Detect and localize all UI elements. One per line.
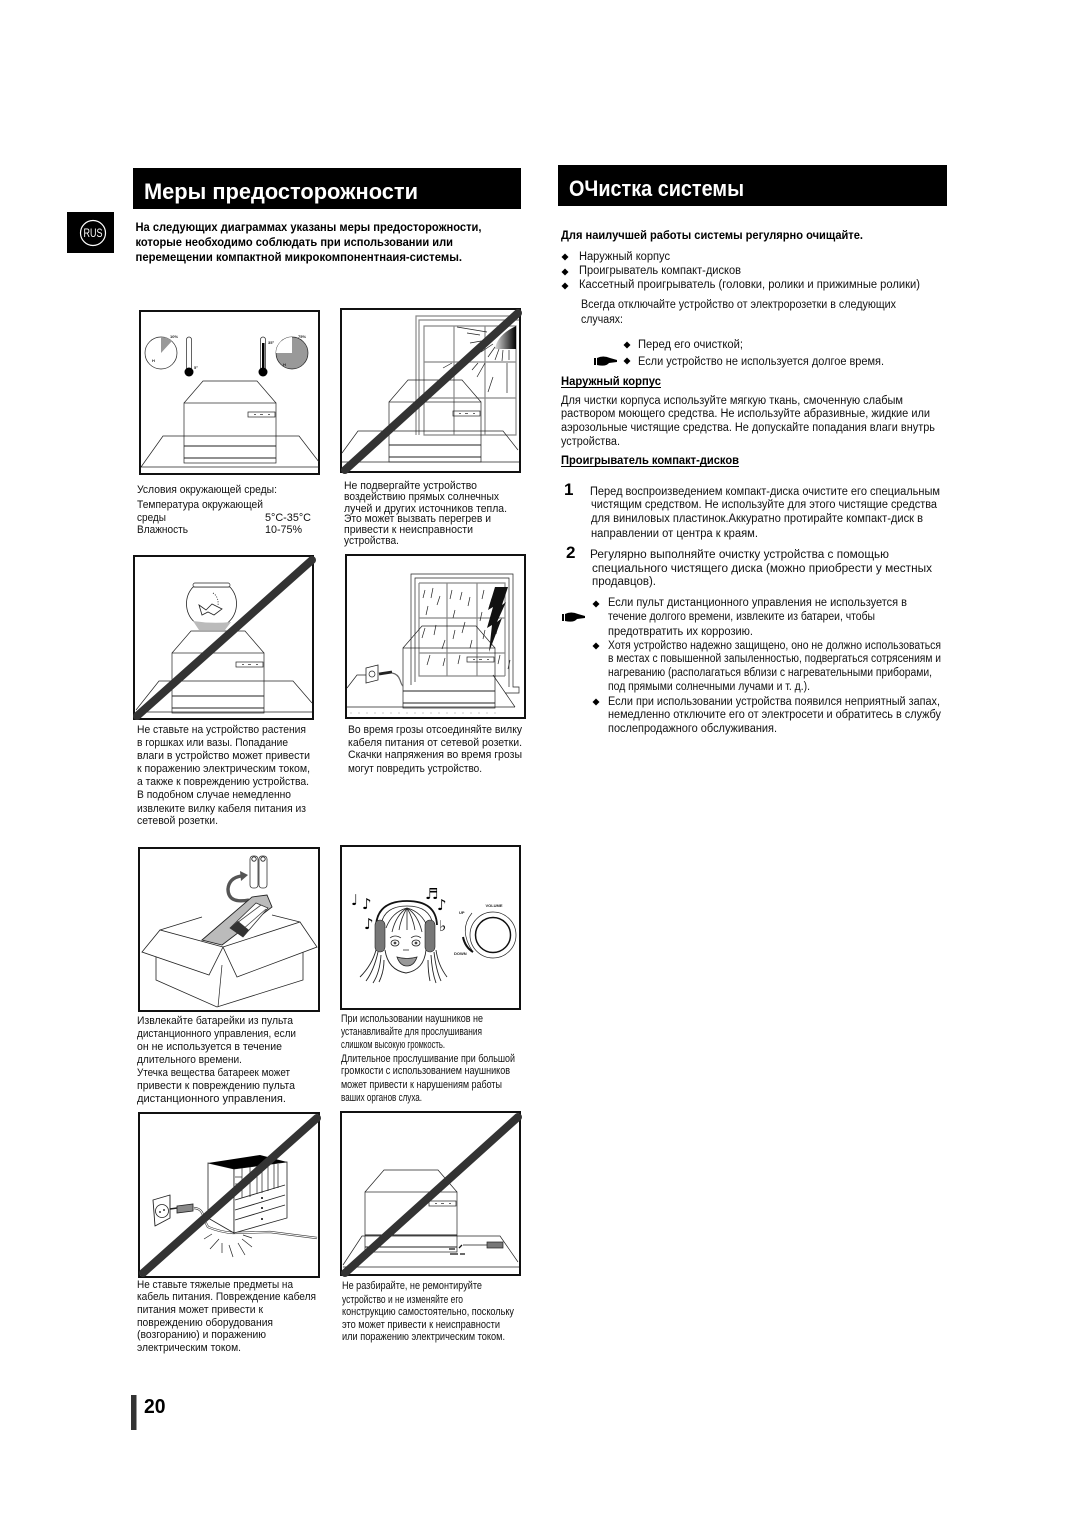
caption: operating environment: среды bbox=[137, 512, 166, 524]
bangs bbox=[386, 908, 428, 932]
hair bbox=[360, 950, 447, 983]
section: outer casing: раствором моющего средства. Не используйте абразивные, жидкие или bbox=[561, 408, 930, 420]
caption: no heavy objects on cable: электрическим током. bbox=[137, 1342, 241, 1354]
panel: operating environment bbox=[140, 311, 319, 474]
music notes: ♬ bbox=[425, 885, 438, 903]
receiver bbox=[403, 626, 495, 708]
music notes: ♭ bbox=[439, 917, 446, 935]
cabinet with books bbox=[208, 1155, 287, 1233]
notes: maintenance: Если при использовании устройства появился неприятный запах, bbox=[608, 696, 940, 708]
notes: maintenance: послепродажного обслуживания. bbox=[608, 723, 777, 735]
notes: maintenance: предотвратить их коррозию. bbox=[608, 626, 753, 638]
caption: do not disassemble bbox=[342, 1280, 514, 1343]
icon: thermometer 5 degrees: 5° bbox=[194, 365, 198, 370]
lightning bolt bbox=[487, 587, 508, 652]
notes: maintenance: Если пульт дистанционного управления не используется в bbox=[608, 597, 907, 609]
caption: remove batteries: Утечка вещества батареек может bbox=[137, 1067, 290, 1079]
icon: pointing hand bbox=[594, 356, 617, 366]
caption: unplug during thunderstorm bbox=[348, 724, 522, 775]
caption: no vases on device: Не ставьте на устройство растения bbox=[137, 724, 306, 736]
caption: operating environment: 10-75% bbox=[265, 524, 302, 536]
caption: operating environment: Условия окружающей среды: bbox=[137, 484, 277, 496]
window with sun bbox=[416, 316, 519, 435]
receiver bbox=[184, 381, 276, 463]
icon: thermometer 35 degrees bbox=[258, 337, 274, 376]
panel: no vases on device bbox=[134, 556, 313, 719]
music notes: ♩ bbox=[351, 891, 358, 909]
step 2: Регулярно выполняйте очистку устройства с помощью bbox=[590, 549, 889, 561]
caption: unplug during thunderstorm: Во время грозы отсоединяйте вилку bbox=[348, 724, 522, 736]
caption: remove batteries: длительного времени. bbox=[137, 1054, 242, 1066]
caption: remove batteries: Извлекайте батарейки из пульта bbox=[137, 1015, 294, 1027]
caption: no direct sunlight: устройства. bbox=[344, 535, 399, 547]
step 1: для виниловых пластинок.Аккуратно протирайте компакт-диск в bbox=[591, 513, 923, 525]
note: when to unplug: Перед его очисткой; bbox=[638, 339, 743, 351]
receiver bbox=[389, 380, 481, 462]
section: outer casing: Для чистки корпуса используйте мягкую ткань, смоченную слабым bbox=[561, 395, 903, 407]
face bbox=[385, 950, 426, 973]
intro text: cleaning: Для наилучшей работы системы регулярно очищайте. bbox=[561, 230, 863, 242]
caption: unplug during thunderstorm: кабеля питания от сетевой розетки. bbox=[348, 737, 522, 749]
caption: no direct sunlight: привести к неисправности bbox=[344, 524, 473, 536]
caption: operating environment bbox=[137, 484, 311, 536]
icon: humidity pie 10% bbox=[145, 334, 178, 369]
wall socket and plug bbox=[153, 1195, 193, 1226]
notes: maintenance: нагреванию (располагаться вблизи с нагревательными приборами, bbox=[608, 667, 932, 679]
heading bar: precautions bbox=[133, 168, 521, 209]
section: outer casing: Наружный корпус bbox=[561, 376, 662, 388]
eyes bbox=[391, 940, 399, 946]
caption: headphone volume: громкости с использованием наушников bbox=[341, 1065, 510, 1077]
text: unplug notice bbox=[581, 299, 896, 326]
intro text: precautions: На следующих диаграммах указаны меры предосторожности, bbox=[136, 222, 482, 234]
curved arrow bbox=[228, 871, 249, 901]
caption: no heavy objects on cable: (возгоранию) и поражению bbox=[137, 1329, 266, 1341]
receiver bbox=[365, 1170, 457, 1252]
volume knob: UP bbox=[459, 910, 465, 915]
step 1: направлении от центра к краям. bbox=[591, 528, 758, 540]
caption: headphone volume: слишком высокую громкость. bbox=[341, 1039, 445, 1051]
step 1: Перед воспроизведением компакт-диска очистите его специальным bbox=[590, 486, 940, 498]
caption: headphone volume bbox=[341, 1013, 515, 1104]
music notes bbox=[351, 885, 447, 935]
caption: headphone volume: может привести к нарушениям работы bbox=[341, 1079, 502, 1091]
step 2: 2 bbox=[566, 543, 575, 562]
music notes: ♪ bbox=[364, 915, 374, 933]
caption: headphone volume: устанавливайте для прослушивания bbox=[341, 1026, 482, 1038]
caption: do not disassemble: Не разбирайте, не ремонтируйте bbox=[342, 1280, 482, 1292]
bulleted list: parts to clean: Проигрыватель компакт-дисков bbox=[579, 265, 741, 277]
caption: no vases on device: к поражению электрическим током, bbox=[137, 763, 310, 775]
intro text: precautions bbox=[136, 222, 482, 264]
panel: remove batteries bbox=[139, 848, 319, 1011]
socket and plug bbox=[366, 665, 403, 686]
prohibition slash bbox=[345, 313, 518, 470]
notes: maintenance: немедленно отключите его от электросети и обратитесь в службу bbox=[608, 709, 941, 721]
page number: 20 bbox=[144, 1396, 166, 1418]
caption: no heavy objects on cable: Не ставьте тяжелые предметы на bbox=[137, 1279, 294, 1291]
caption: no vases on device: извлеките вилку кабеля питания из bbox=[137, 803, 306, 815]
caption: remove batteries: он не используется в течение bbox=[137, 1041, 282, 1053]
bulleted list: parts to clean: Кассетный проигрыватель (головки, ролики и прижимные ролики) bbox=[579, 279, 920, 291]
caption: no direct sunlight: Это может вызвать перегрев и bbox=[344, 513, 491, 525]
language badge: RUS: RUS bbox=[84, 228, 103, 240]
batteries bbox=[250, 856, 267, 888]
girl with headphones bbox=[360, 901, 447, 983]
ear pads bbox=[375, 920, 385, 952]
fishbowl bbox=[186, 583, 236, 630]
step 2 bbox=[566, 543, 932, 588]
table bbox=[343, 1236, 519, 1267]
notes: maintenance: в местах с повышенной запыленностью, подвергаться сотрясениям и bbox=[608, 653, 941, 665]
text: unplug notice: случаях: bbox=[581, 314, 623, 326]
icon: humidity pie 75%: H bbox=[283, 362, 286, 367]
caption: no vases on device: сетевой розетки. bbox=[137, 815, 218, 827]
caption: unplug during thunderstorm: Скачки напряжения во время грозы bbox=[348, 749, 522, 761]
caption: operating environment: Влажность bbox=[137, 524, 188, 536]
crush spark lines bbox=[204, 1234, 252, 1257]
caption: no direct sunlight: воздействию прямых солнечных bbox=[344, 491, 499, 503]
volume knob: DOWN bbox=[454, 951, 467, 956]
caption: headphone volume: Длительное прослушивание при большой bbox=[341, 1053, 515, 1065]
intro text: precautions: которые необходимо соблюдать при использовании или bbox=[136, 237, 453, 249]
volume knob bbox=[454, 903, 516, 958]
section: outer casing: устройства. bbox=[561, 436, 620, 448]
bulleted list: parts to clean: Наружный корпус bbox=[579, 251, 670, 263]
icon: humidity pie 10%: H bbox=[152, 358, 155, 363]
text: unplug notice: Всегда отключайте устройство от электророзетки в следующих bbox=[581, 299, 896, 311]
table bbox=[342, 431, 519, 462]
caption: no heavy objects on cable bbox=[137, 1279, 316, 1354]
caption: remove batteries bbox=[137, 1015, 296, 1105]
table bbox=[136, 681, 312, 712]
heading bar: precautions: Меры предосторожности bbox=[144, 179, 418, 204]
prohibition slash bbox=[143, 1118, 317, 1273]
heading bar: system cleaning: ОЧистка системы bbox=[569, 176, 744, 201]
step 2: специального чистящего диска (можно приобрести у местных bbox=[592, 563, 932, 575]
page number bbox=[131, 1395, 166, 1430]
step 1: 1 bbox=[564, 480, 573, 499]
heading bar: system cleaning bbox=[558, 165, 947, 206]
caption: no direct sunlight: лучей и других источников тепла. bbox=[344, 503, 507, 515]
table bbox=[347, 675, 515, 707]
caption: no heavy objects on cable: повреждению оборудования bbox=[137, 1317, 273, 1329]
step 1 bbox=[564, 480, 940, 540]
window with rain bbox=[411, 574, 519, 693]
icon: pointing hand bbox=[562, 612, 585, 622]
volume knob: VOLUME bbox=[485, 903, 503, 908]
icon: humidity pie 75% bbox=[276, 334, 308, 369]
prohibition slash bbox=[345, 1117, 518, 1273]
remote control bbox=[202, 895, 272, 945]
caption: headphone volume: При использовании наушников не bbox=[341, 1013, 483, 1025]
headband bbox=[376, 901, 437, 925]
step 1: чистящим средством. Не используйте для этого чистящие средства bbox=[591, 499, 938, 511]
icon: thermometer 5 degrees bbox=[184, 337, 198, 376]
section: outer casing: аэрозольные чистящие средства. Не допускайте попадания влаги внутрь bbox=[561, 422, 935, 434]
caption: do not disassemble: это может привести к неисправности bbox=[342, 1319, 500, 1331]
caption: no vases on device: в горшках или вазы. Попадание bbox=[137, 737, 288, 749]
caption: no vases on device: В подобном случае немедленно bbox=[137, 789, 291, 801]
caption: no vases on device: а также к повреждению устройства. bbox=[137, 776, 309, 788]
language badge: RUS bbox=[67, 212, 114, 253]
panel: do not disassemble bbox=[341, 1112, 520, 1275]
music notes: ♪ bbox=[437, 896, 447, 914]
caption: no direct sunlight: Не подвергайте устройство bbox=[344, 480, 477, 492]
section heading: CD player: Проигрыватель компакт-дисков bbox=[561, 455, 739, 467]
section: outer casing bbox=[561, 376, 935, 448]
caption: headphone volume: ваших органов слуха. bbox=[341, 1092, 422, 1104]
panel: no heavy objects on cable bbox=[139, 1113, 319, 1277]
panel: headphone volume bbox=[341, 846, 520, 1009]
box back edges bbox=[160, 915, 300, 930]
caption: remove batteries: дистанционного управления. bbox=[137, 1093, 286, 1105]
cardboard box bbox=[142, 922, 317, 1007]
caption: no vases on device bbox=[137, 724, 310, 827]
notes: maintenance: течение долгого времени, извлеките из батареи, чтобы bbox=[608, 611, 875, 623]
caption: no heavy objects on cable: кабель питания. Повреждение кабеля bbox=[137, 1291, 316, 1303]
caption: no vases on device: влаги в устройство может привести bbox=[137, 750, 310, 762]
bulleted list: parts to clean bbox=[562, 251, 920, 291]
icon: humidity pie 10%: 10% bbox=[170, 334, 178, 339]
table bbox=[141, 436, 319, 467]
music notes: ♪ bbox=[362, 895, 372, 913]
notes: maintenance: Хотя устройство надежно защищено, оно не должно использоваться bbox=[608, 640, 941, 652]
caption: no direct sunlight bbox=[344, 480, 507, 547]
caption: unplug during thunderstorm: могут повредить устройство. bbox=[348, 763, 482, 775]
prohibition slash bbox=[137, 560, 312, 716]
panel: unplug during thunderstorm bbox=[346, 555, 525, 718]
step 2: продавцов). bbox=[592, 576, 656, 588]
notes: maintenance: под прямыми солнечными лучами и т. д.). bbox=[608, 681, 810, 693]
note: when to unplug bbox=[594, 339, 884, 368]
note: when to unplug: Если устройство не используется долгое время. bbox=[638, 356, 884, 368]
receiver bbox=[172, 631, 264, 713]
caption: remove batteries: привести к повреждению пульта bbox=[137, 1080, 296, 1092]
caption: do not disassemble: или поражению электрическим током. bbox=[342, 1331, 505, 1343]
caption: do not disassemble: конструкцию самостоятельно, поскольку bbox=[342, 1306, 514, 1318]
caption: no heavy objects on cable: питания может привести к bbox=[137, 1304, 263, 1316]
caption: operating environment: 5°C-35°C bbox=[265, 512, 311, 524]
panel: no direct sunlight bbox=[341, 309, 520, 472]
notes: maintenance bbox=[562, 597, 941, 735]
intro text: precautions: перемещении компактной микрокомпонентнаия-системы. bbox=[136, 252, 462, 264]
icon: thermometer 35 degrees: 35° bbox=[268, 340, 274, 345]
caption: do not disassemble: устройство и не изменяйте его bbox=[342, 1294, 463, 1306]
mouth bbox=[397, 957, 417, 966]
caption: remove batteries: дистанционного управления, если bbox=[137, 1028, 296, 1040]
screwdriver and screws bbox=[449, 1242, 503, 1254]
caption: operating environment: Температура окружающей bbox=[137, 499, 263, 511]
power cable bbox=[193, 1208, 317, 1238]
icon: humidity pie 75%: 75% bbox=[298, 334, 306, 339]
